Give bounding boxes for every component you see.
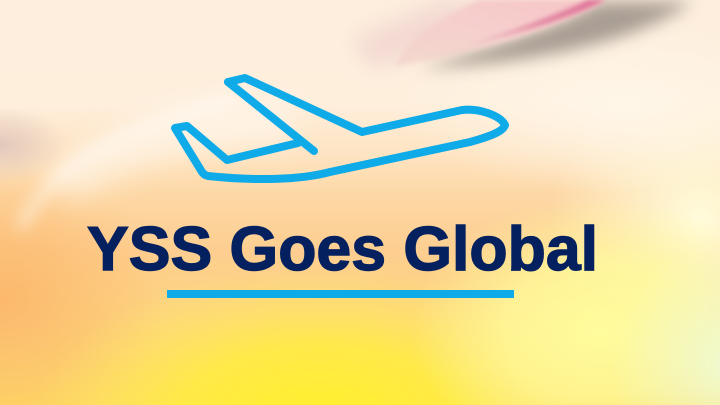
title underline bbox=[167, 290, 514, 298]
title: YSS Goes Global bbox=[87, 215, 598, 284]
fuselage and tail outline bbox=[175, 78, 505, 179]
icon: airplane outline bbox=[175, 78, 505, 179]
wing leading edge bbox=[228, 82, 314, 151]
